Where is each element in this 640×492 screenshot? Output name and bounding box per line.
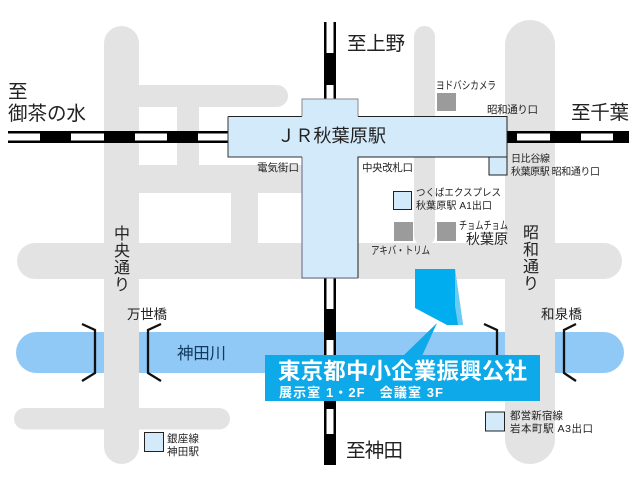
- bridge: 万世橋: [82, 307, 168, 381]
- road label: 昭和通り: 昭: [523, 225, 539, 242]
- rail: north-south line: [324, 22, 336, 465]
- landmark: アキバ・トリム: [371, 222, 430, 257]
- callout pointer: [403, 323, 437, 356]
- station name: ＪＲ秋葉原駅: [277, 126, 386, 146]
- station entrance: 銀座線 神田駅: 神田駅: [167, 445, 200, 458]
- station entrance: 都営新宿線 岩本町駅: 都営新宿線: [510, 409, 564, 422]
- direction label: 至御茶の水: 御茶の水: [8, 103, 86, 125]
- road label: 昭和通り: り: [523, 276, 539, 293]
- landmark: チョムチョム秋葉原: チョムチョム: [459, 219, 508, 232]
- landmark: ヨドバシカメラ: ヨドバシカメラ: [436, 79, 496, 92]
- direction label: 至千葉: 至千葉: [571, 102, 629, 124]
- direction label: 至上野: 至上野: [347, 33, 405, 55]
- station entrance: 都営新宿線 岩本町駅: 岩本町駅 A3出口: [510, 422, 593, 435]
- road label: 昭和通り: 通: [523, 258, 539, 276]
- direction label: 至御茶の水: 至: [8, 81, 28, 103]
- road label: 中央通り: [114, 225, 130, 294]
- road label: 中央通り: り: [114, 277, 130, 294]
- direction label: 至神田: 至神田: [346, 440, 403, 462]
- road label: 中央通り: 通: [114, 259, 130, 277]
- station: JR秋葉原駅: [228, 99, 507, 278]
- direction label: 至御茶の水: [8, 81, 86, 125]
- building marker: [403, 269, 463, 356]
- river: 神田川: [16, 332, 624, 373]
- station entrance: つくばエクスプレス: 秋葉原駅 A1出口: [416, 199, 492, 212]
- subway entrance: 日比谷線 秋葉原駅: 日比谷線: [511, 152, 550, 165]
- station entrance: 銀座線 神田駅: [144, 432, 200, 458]
- road label: 昭和通り: [523, 225, 539, 293]
- exit labels: 昭和通り口: [487, 104, 538, 116]
- road label: 中央通り: 中: [114, 225, 130, 243]
- landmark: チョムチョム秋葉原: 秋葉原: [466, 231, 508, 247]
- rail: east line: [505, 131, 629, 143]
- banner title: 東京都中小企業振興公社: [278, 359, 527, 384]
- bridge: 和泉橋: [484, 306, 582, 381]
- landmark: ヨドバシカメラ: [436, 79, 496, 111]
- callout banner: 東京都中小企業振興公社: [265, 355, 540, 401]
- subway entrance: 日比谷線 秋葉原駅: 秋葉原駅 昭和通り口: [511, 165, 600, 178]
- bridge: 和泉橋: 和泉橋: [541, 306, 582, 322]
- river label: 神田川: [177, 344, 226, 363]
- banner subtitle: 展示室 1・2F 会議室 3F: [279, 385, 443, 400]
- landmark: チョムチョム秋葉原: [437, 219, 508, 247]
- station entrance: つくばエクスプレス: つくばエクスプレス: [416, 187, 501, 199]
- road label: 昭和通り: 和: [523, 241, 539, 259]
- station entrance: 銀座線 神田駅: 銀座線: [167, 432, 200, 445]
- exit labels: [257, 104, 538, 174]
- bridge: 万世橋: 万世橋: [127, 307, 168, 322]
- exit labels: 中央改札口: [362, 161, 413, 174]
- exit labels: 電気街口: [257, 161, 299, 174]
- station entrance: つくばエクスプレス: [394, 187, 501, 212]
- subway entrance: 日比谷線 秋葉原駅: [489, 152, 600, 178]
- rail: west line: [8, 131, 230, 143]
- station entrance: 都営新宿線 岩本町駅: [486, 409, 593, 435]
- road label: 中央通り: 央: [114, 242, 130, 260]
- landmark: アキバ・トリム: アキバ・トリム: [371, 244, 430, 257]
